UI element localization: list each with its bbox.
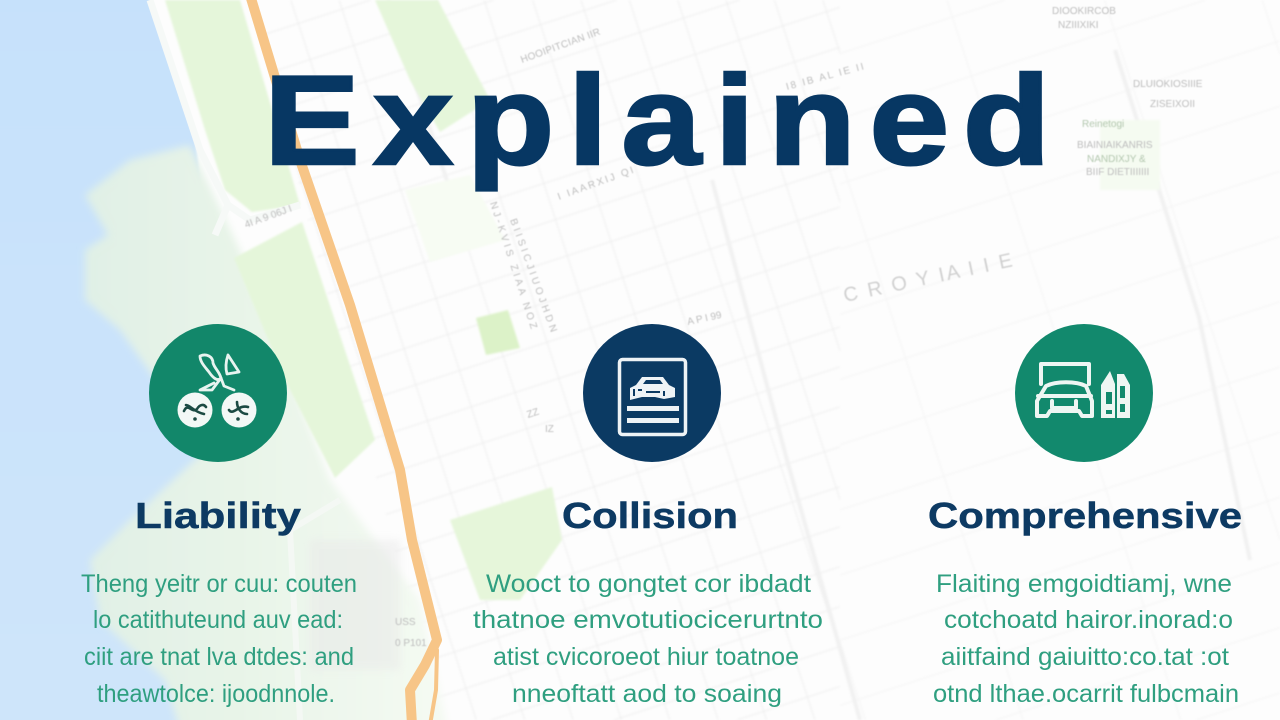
map: faint labels: Reinetogi (1082, 119, 1124, 130)
panel: liability (81, 324, 357, 708)
map: orange highway (250, 0, 437, 720)
text block: collision (473, 570, 823, 720)
map: faint labels: NANDIXJY & (1087, 154, 1146, 165)
map: faint labels: DIOOKIRCOB (1052, 6, 1116, 17)
map: faint labels: NJ-KVIS ZIAA NOZ (487, 201, 539, 330)
map: faint labels: I IAARXIJ QI (556, 165, 635, 203)
text block: comprehensive: aiitfaind gaiuitto:co.tat :ot (941, 643, 1229, 671)
map: green patches (165, 0, 1160, 600)
map: faint labels: NZIIIXIKI (1058, 20, 1099, 31)
map: faint labels: BIAINIAIKANRIS (1077, 140, 1153, 151)
text block: comprehensive (933, 570, 1239, 720)
map: faint labels: IZ (545, 424, 554, 435)
text block: collision: nneoftatt aod to soaing (512, 680, 782, 708)
icon: collision document with car (583, 324, 721, 462)
icon: liability cherries (149, 324, 287, 462)
map: faint labels: BIIF DIETIIIIIII (1086, 167, 1149, 178)
map: faint labels: A P I 99 (686, 310, 723, 328)
map: faint labels: 4I A 9 06J I (243, 204, 294, 231)
text block: comprehensive: cotchoatd hairor.inorad:o (944, 606, 1233, 634)
map: coastal parkland (85, 145, 450, 720)
text block: liability: Theng yeitr or cuu: couten (81, 570, 357, 598)
panel: collision (473, 324, 823, 720)
map: faint labels: ZZ (526, 407, 541, 421)
map: faint labels: C R O Y IA I I E (841, 250, 1014, 307)
map: water (0, 0, 215, 720)
text block: liability: lo catithuteund auv ead: (93, 606, 343, 634)
map: faint labels: BIISICJIUOJHDN (507, 217, 559, 334)
text block: comprehensive: otnd lthae.ocarrit fulbcmain (933, 680, 1239, 708)
map: faint labels: ZISEIXOII (1150, 99, 1195, 110)
panel: comprehensive (928, 324, 1242, 720)
heading: liability: Liability (135, 495, 301, 536)
map: faint labels: DLUIOKIOSIIIE (1133, 79, 1203, 90)
text block: collision: thatnoe emvotutiocicerurtnto (473, 606, 823, 634)
map: faint labels: 0 P101 (395, 638, 427, 649)
title: Explained (264, 49, 1064, 191)
text block: liability: ciit are tnat lva dtdes: and (84, 643, 354, 671)
map: faint labels (243, 6, 1203, 649)
heading: collision: Collision (562, 495, 738, 536)
text block: liability: theawtolce: ijoodnnole. (97, 680, 335, 708)
icon: comprehensive car and bottles (1015, 324, 1153, 462)
text block: comprehensive: Flaiting emgoidtiamj, wne (936, 570, 1232, 598)
text block: collision: atist cvicoroeot hiur toatnoe (493, 643, 799, 671)
text block: collision: Wooct to gongtet cor ibdadt (486, 570, 811, 598)
map: shoreline path (150, 0, 300, 235)
map: faint labels: HOOIPITCIAN IIR (519, 27, 602, 66)
map: faint labels: USS (395, 617, 416, 628)
heading: comprehensive: Comprehensive (928, 495, 1242, 536)
map: faint labels: I8 IB AL IE II (785, 62, 865, 93)
text block: liability (81, 570, 357, 708)
